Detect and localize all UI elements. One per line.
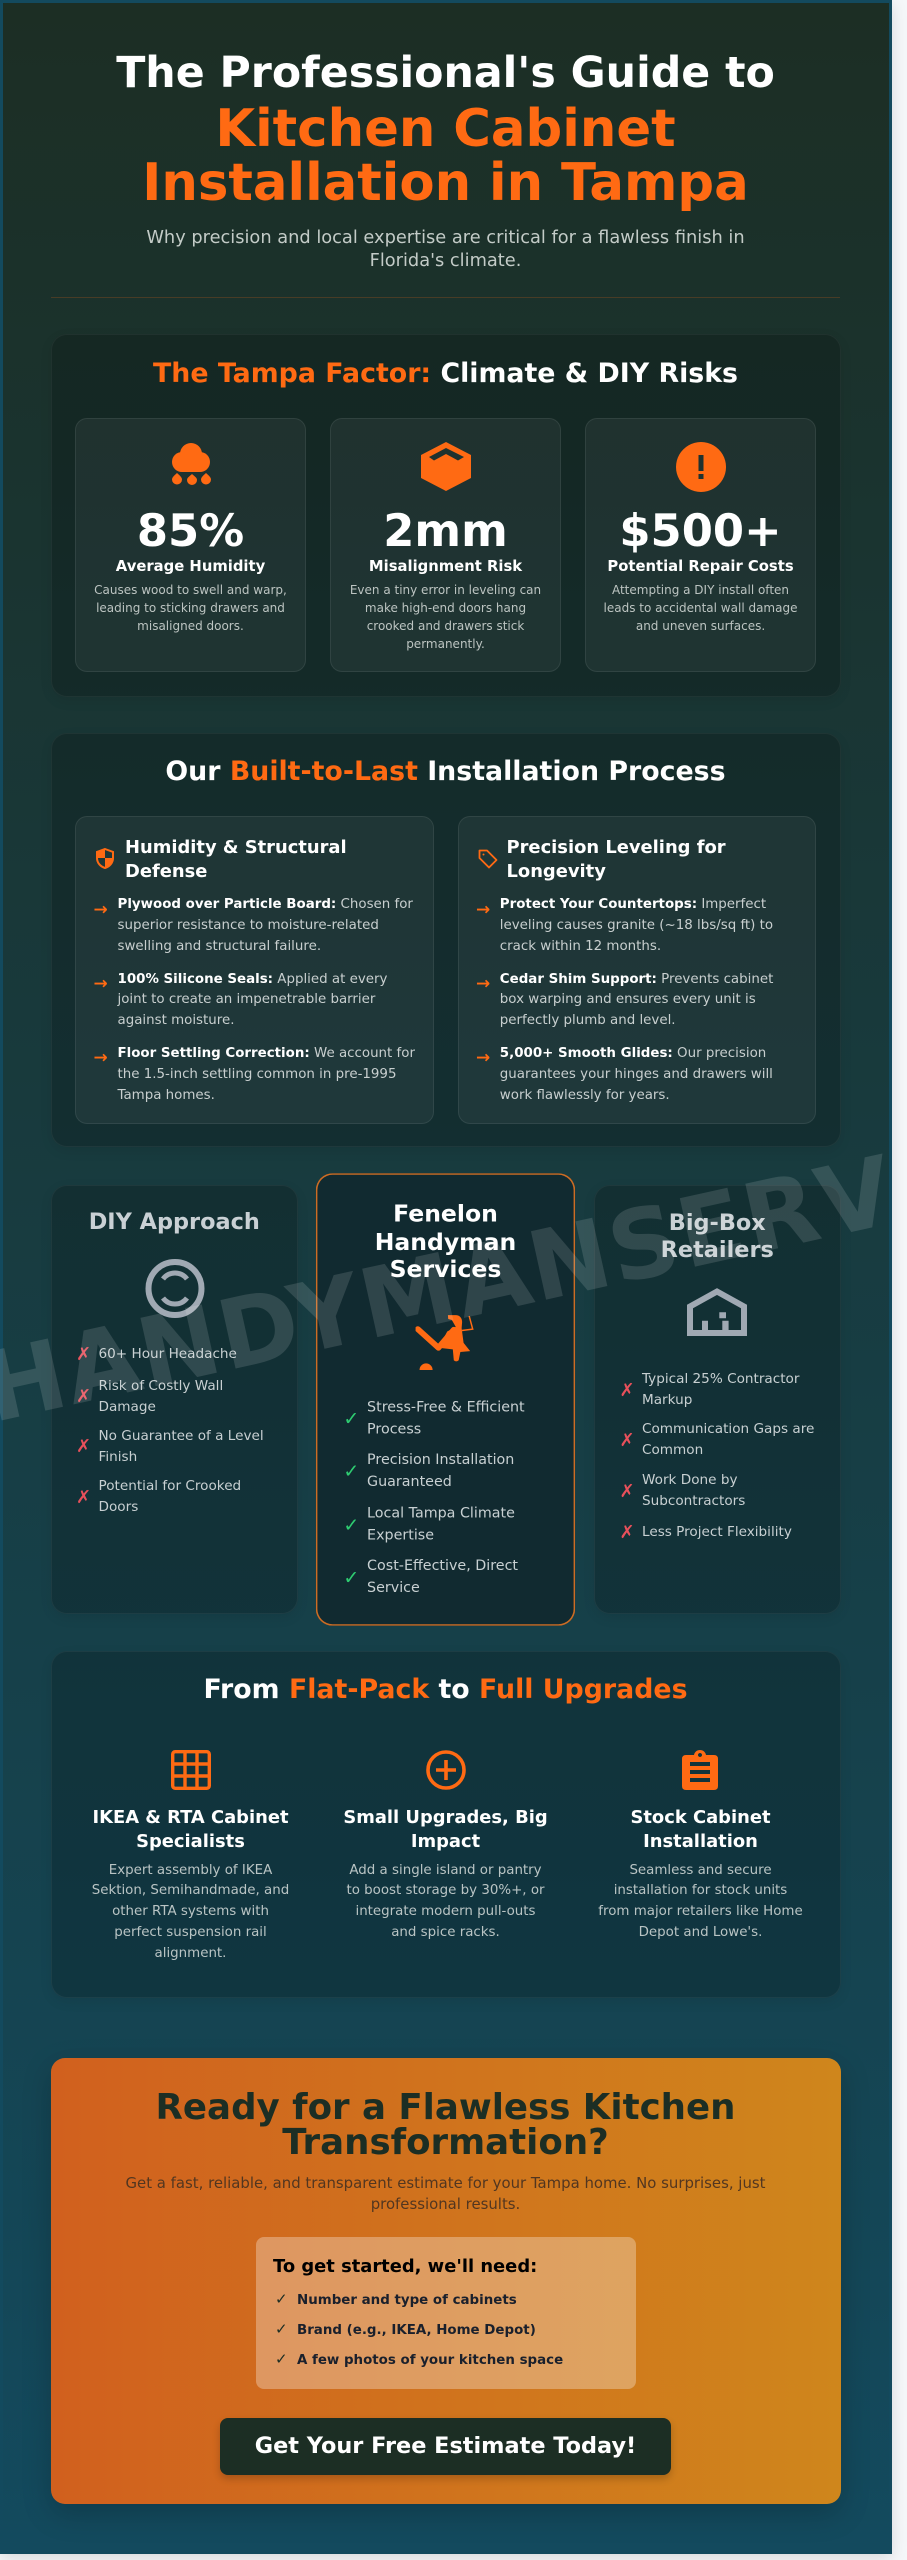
service description (585, 1861, 816, 1944)
service title (330, 1806, 561, 1854)
list item (620, 1472, 745, 1509)
icon: tag (478, 850, 498, 868)
title: The Professional's Guide to (116, 48, 775, 98)
bullet text: guarantees your hinges and drawers will (500, 1067, 773, 1082)
list item: Guaranteed (367, 1474, 452, 1491)
list item: Doors (98, 1499, 138, 1515)
list item: ✗ (76, 1436, 91, 1457)
requirement: ✓ (275, 2320, 288, 2338)
stat description (350, 583, 541, 651)
cta subtext: professional results. (371, 2195, 520, 2213)
list item: Subcontractors (642, 1493, 745, 1509)
card title (506, 836, 726, 882)
stat value: $500+ (619, 504, 782, 556)
list item: Stress-Free & Efficient (367, 1399, 525, 1416)
bullet text (500, 1046, 773, 1103)
service description: Expert assembly of IKEA (109, 1863, 272, 1878)
list item: No Guarantee of a Level (98, 1428, 264, 1444)
bullet text: the 1.5-inch settling common in pre-1995 (118, 1067, 396, 1082)
heading: Our Built-to-Last Installation Process (165, 756, 726, 787)
list item: ✗ (620, 1430, 635, 1451)
list item (343, 1452, 514, 1491)
service title: Impact (411, 1831, 480, 1852)
service description (75, 1861, 306, 1965)
list item: ✓ (343, 1567, 359, 1589)
bullet text: perfectly plumb and level. (500, 1013, 676, 1028)
title highlight: Installation in Tampa (142, 153, 749, 213)
panel: services (50, 1651, 840, 1998)
cta subtext: Get a fast, reliable, and transparent estimate for your Tampa home. No surprises, just (126, 2174, 765, 2192)
service description: alignment. (155, 1946, 226, 1961)
heading: Big-Box (669, 1210, 766, 1236)
list item: Typical 25% Contractor (642, 1371, 799, 1387)
stat value: 85% (137, 504, 244, 556)
stat description: leads to accidental wall damage (604, 601, 797, 615)
service title: Specialists (136, 1831, 245, 1852)
bullet text: leveling causes granite (~18 lbs/sq ft) to (500, 918, 773, 933)
panel: big-box retailers (594, 1185, 840, 1614)
list item (343, 1505, 515, 1544)
list item: ✗ (620, 1380, 635, 1400)
list item: Markup (642, 1392, 692, 1408)
bullet text: Tampa homes. (118, 1088, 215, 1103)
requirement (275, 2349, 563, 2371)
stat description: and uneven surfaces. (636, 619, 765, 633)
stat description: Even a tiny error in leveling can (350, 583, 541, 597)
list item: ✗ (620, 1480, 635, 1502)
service description: and spice racks. (391, 1925, 500, 1940)
bullet text (500, 972, 774, 1028)
service title: Stock Cabinet (630, 1807, 771, 1828)
heading: The Tampa Factor: Climate & DIY Risks (153, 358, 738, 389)
stat label: Average Humidity (116, 558, 265, 574)
list item: Common (642, 1442, 703, 1458)
icon: plus circle (426, 1750, 466, 1790)
requirement: ✓ (275, 2290, 288, 2308)
requirement: ✓ (275, 2350, 288, 2368)
cta button (220, 2418, 671, 2474)
list item (76, 1478, 241, 1515)
bullet text (118, 897, 413, 954)
service title: Installation (643, 1831, 758, 1852)
list item (620, 1421, 814, 1458)
list item (620, 1522, 792, 1543)
card title: Humidity & Structural (125, 836, 347, 858)
list item: Potential for Crooked (98, 1478, 241, 1494)
icon: rain cloud (172, 443, 211, 485)
heading: Retailers (661, 1237, 774, 1263)
list item (76, 1428, 264, 1465)
list item (343, 1399, 525, 1438)
stat description: crooked and drawers stick (367, 619, 524, 633)
service: upgrades (330, 1741, 561, 1981)
bullet arrow: → (94, 900, 108, 920)
bullet arrow: → (476, 1048, 490, 1068)
service description: perfect suspension rail (114, 1925, 267, 1940)
stat label: Potential Repair Costs (607, 558, 794, 574)
service description: installation for stock units (614, 1883, 787, 1898)
bullet text: crack within 12 months. (500, 939, 661, 954)
list item: Precision Installation (367, 1452, 514, 1469)
requirements title: To get started, we'll need: (273, 2256, 537, 2276)
list item: ✗ (76, 1344, 91, 1365)
bullet text (117, 972, 387, 1028)
service description (330, 1861, 561, 1944)
list item: 60+ Hour Headache (98, 1346, 237, 1362)
icon: alert (676, 442, 726, 492)
list item: Communication Gaps are (642, 1421, 814, 1437)
cta heading: Transformation? (282, 2122, 609, 2163)
service title: Small Upgrades, Big (343, 1807, 548, 1828)
panel: fenelon handyman services (316, 1173, 575, 1626)
list item: ✓ (343, 1514, 359, 1536)
card title: Longevity (506, 860, 606, 882)
icon: grid (170, 1750, 210, 1790)
list item (620, 1371, 800, 1408)
list item: Service (367, 1580, 420, 1597)
stat description: permanently. (406, 637, 485, 651)
stat card: misalignment (330, 418, 561, 672)
stat label: Misalignment Risk (369, 558, 522, 574)
service title (75, 1806, 306, 1854)
requirements box (256, 2237, 636, 2389)
icon: box (421, 442, 471, 491)
header (51, 48, 840, 298)
list item (76, 1344, 237, 1365)
heading: Services (390, 1256, 501, 1284)
bullet arrow: → (94, 974, 108, 994)
title highlight: Kitchen Cabinet (215, 99, 676, 159)
stat description: leading to sticking drawers and (96, 601, 285, 615)
list item: Work Done by (642, 1472, 738, 1488)
list item (343, 1558, 518, 1597)
list item: Cost-Effective, Direct (367, 1558, 518, 1575)
service: stock (585, 1741, 816, 1981)
bullet text: box warping and ensures every unit is (500, 992, 756, 1007)
list item: ✓ (343, 1461, 359, 1483)
panel: installation process (50, 732, 840, 1147)
panel: the tampa factor (50, 334, 840, 697)
list item: Less Project Flexibility (642, 1524, 792, 1540)
bullet text: Protect Your Countertops: Imperfect (500, 897, 766, 912)
requirement (275, 2289, 517, 2311)
card title: Defense (125, 860, 207, 882)
cta subtext (50, 2173, 840, 2215)
list item: Damage (98, 1399, 156, 1415)
stat description (94, 583, 287, 633)
stat card: repair cost (585, 418, 816, 672)
bullet arrow: → (476, 974, 490, 994)
heading (375, 1201, 516, 1284)
list item: Process (367, 1421, 421, 1438)
icon: handyman (416, 1315, 474, 1370)
list item: Local Tampa Climate (367, 1505, 515, 1522)
list item: Finish (98, 1449, 137, 1465)
service: ikea (92, 1750, 289, 1961)
stat description: misaligned doors. (137, 619, 244, 633)
stat description: Causes wood to swell and warp, (94, 583, 287, 597)
subtitle: Florida's climate. (370, 250, 521, 271)
bullet text: 5,000+ Smooth Glides: Our precision (500, 1046, 766, 1061)
bullet text: 100% Silicone Seals: Applied at every (118, 972, 387, 987)
cta button: Get Your Free Estimate Today! (255, 2433, 636, 2459)
list item: ✗ (76, 1386, 91, 1407)
requirement: Number and type of cabinets (297, 2293, 517, 2308)
process card: leveling (458, 816, 816, 1124)
bullet text (117, 1046, 415, 1103)
call to action panel (50, 2058, 840, 2504)
bullet arrow: → (476, 900, 490, 920)
subtitle (146, 226, 745, 271)
list item: ✗ (620, 1522, 635, 1543)
card title (125, 836, 347, 882)
heading: Handyman (375, 1228, 516, 1256)
requirement: A few photos of your kitchen space (297, 2353, 563, 2368)
subtitle: Why precision and local expertise are critical for a flawless finish in (146, 226, 745, 248)
bullet text: swelling and structural failure. (118, 939, 321, 954)
process card: humidity (75, 816, 434, 1124)
cta heading: Ready for a Flawless Kitchen (156, 2087, 735, 2128)
bullet text: Cedar Shim Support: Prevents cabinet (500, 972, 773, 987)
icon: clipboard (682, 1750, 718, 1790)
icon: warehouse (687, 1288, 747, 1336)
card title: Precision Leveling for (506, 836, 726, 858)
requirement: Brand (e.g., IKEA, Home Depot) (297, 2323, 536, 2338)
heading: From Flat-Pack to Full Upgrades (203, 1674, 688, 1705)
service description: Depot and Lowe's. (639, 1925, 762, 1940)
bullet text: superior resistance to moisture-related (118, 918, 379, 933)
stat description (604, 583, 797, 633)
heading: Fenelon (393, 1201, 498, 1228)
service title: IKEA & RTA Cabinet (92, 1807, 289, 1828)
title highlight (142, 99, 749, 213)
bullet text: against moisture. (118, 1013, 234, 1028)
bullet text: Floor Settling Correction: We account for (118, 1046, 415, 1061)
service description: to boost storage by 30%+, or (346, 1883, 545, 1898)
heading: DIY Approach (89, 1209, 260, 1235)
list item: Risk of Costly Wall (98, 1378, 223, 1394)
list item: ✓ (343, 1408, 359, 1430)
list item: Expertise (367, 1527, 434, 1544)
service title (585, 1806, 816, 1854)
service description: integrate modern pull-outs (355, 1904, 536, 1919)
service description: Sektion, Semihandmade, and (92, 1883, 289, 1898)
heading (661, 1210, 774, 1263)
stat value: 2mm (383, 504, 508, 556)
service description: from major retailers like Home (598, 1904, 803, 1919)
list item (76, 1378, 223, 1415)
bullet text: Plywood over Particle Board: Chosen for (118, 897, 413, 912)
list item: ✗ (76, 1487, 91, 1508)
service description: other RTA systems with (112, 1904, 269, 1919)
service description: Seamless and secure (629, 1863, 772, 1878)
icon: circular arrows (146, 1259, 204, 1318)
stat description: Attempting a DIY install often (612, 583, 789, 597)
bullet text: work flawlessly for years. (500, 1088, 670, 1103)
bullet text: joint to create an impenetrable barrier (118, 992, 375, 1007)
stat description: make high-end doors hang (365, 601, 526, 615)
panel: diy approach (50, 1185, 298, 1614)
service description: Add a single island or pantry (349, 1863, 542, 1878)
cta heading (50, 2090, 840, 2160)
stat card: humidity (75, 418, 306, 672)
requirement (275, 2319, 536, 2341)
icon: shield (96, 848, 114, 869)
bullet arrow: → (94, 1048, 108, 1068)
bullet text (500, 897, 773, 954)
